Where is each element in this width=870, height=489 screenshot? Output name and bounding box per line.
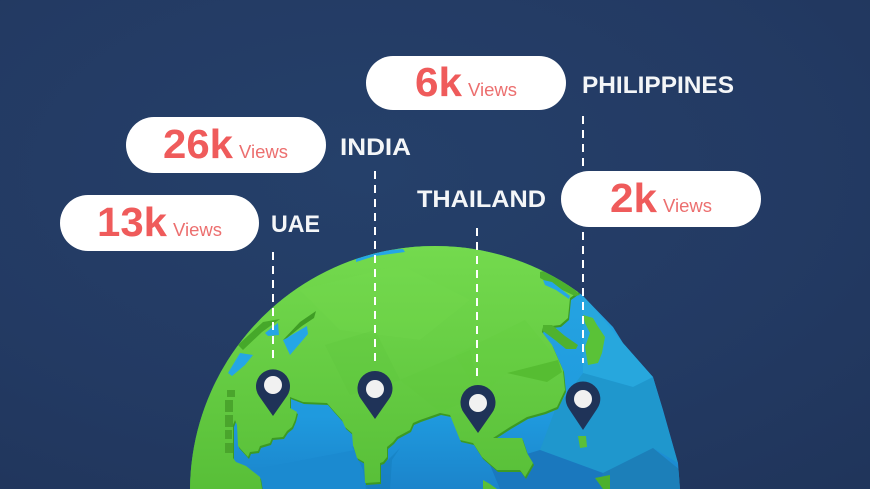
label: Thailand: THAILAND <box>417 186 546 213</box>
pin: UAE <box>256 369 290 416</box>
continent side shading <box>171 235 583 489</box>
globe <box>170 233 680 489</box>
callout: UAE 13k views <box>60 195 259 251</box>
callout: Thailand 2k views <box>561 171 761 227</box>
callout: Thailand 2k views: 2k <box>610 175 657 221</box>
label: Philippines: PHILIPPINES <box>582 72 734 99</box>
callout: India 26k views: 26k <box>163 121 233 167</box>
sea inlet at north pole <box>356 249 405 262</box>
Black Sea <box>265 323 279 336</box>
pin: India <box>358 371 392 419</box>
callout: Thailand 2k views: Views <box>663 196 712 216</box>
Borneo islet <box>595 475 610 489</box>
callout: India 26k views: Views <box>239 142 288 162</box>
callout: Philippines 6k views <box>366 56 566 110</box>
land shadow <box>352 446 400 489</box>
Mediterranean Sea <box>228 353 253 376</box>
connector: UAE <box>272 252 274 360</box>
northern coastal shading <box>238 319 280 350</box>
Philippines islet <box>578 436 587 448</box>
callout: UAE 13k views: 13k <box>97 199 167 245</box>
Sakhalin and northern Japan strip <box>540 270 580 296</box>
Caspian coastal shading <box>283 311 316 340</box>
callout: India 26k views <box>126 117 326 173</box>
Red Sea coastal blocks <box>225 390 235 453</box>
ocean <box>190 245 680 489</box>
callout: Philippines 6k views: 6k <box>415 59 462 105</box>
Sea of Okhotsk notch <box>543 280 570 299</box>
continents: Asia, Arabia and Africa <box>190 246 578 489</box>
pin: Thailand <box>460 385 495 433</box>
label: UAE: UAE <box>271 211 320 238</box>
connector: Philippines lower <box>582 232 584 363</box>
callout: Philippines 6k views: Views <box>468 80 517 100</box>
Sumatra islet <box>483 480 497 489</box>
land facets <box>508 360 562 382</box>
connector: India <box>374 171 376 363</box>
Japan islands <box>583 315 605 365</box>
connector: Philippines upper <box>582 116 584 167</box>
Korean peninsula <box>543 325 578 349</box>
callout: UAE 13k views: Views <box>173 220 222 240</box>
connector: Thailand <box>476 228 478 378</box>
label: India: INDIA <box>340 134 411 161</box>
pin: Philippines <box>566 382 600 430</box>
Caspian Sea <box>283 326 308 355</box>
